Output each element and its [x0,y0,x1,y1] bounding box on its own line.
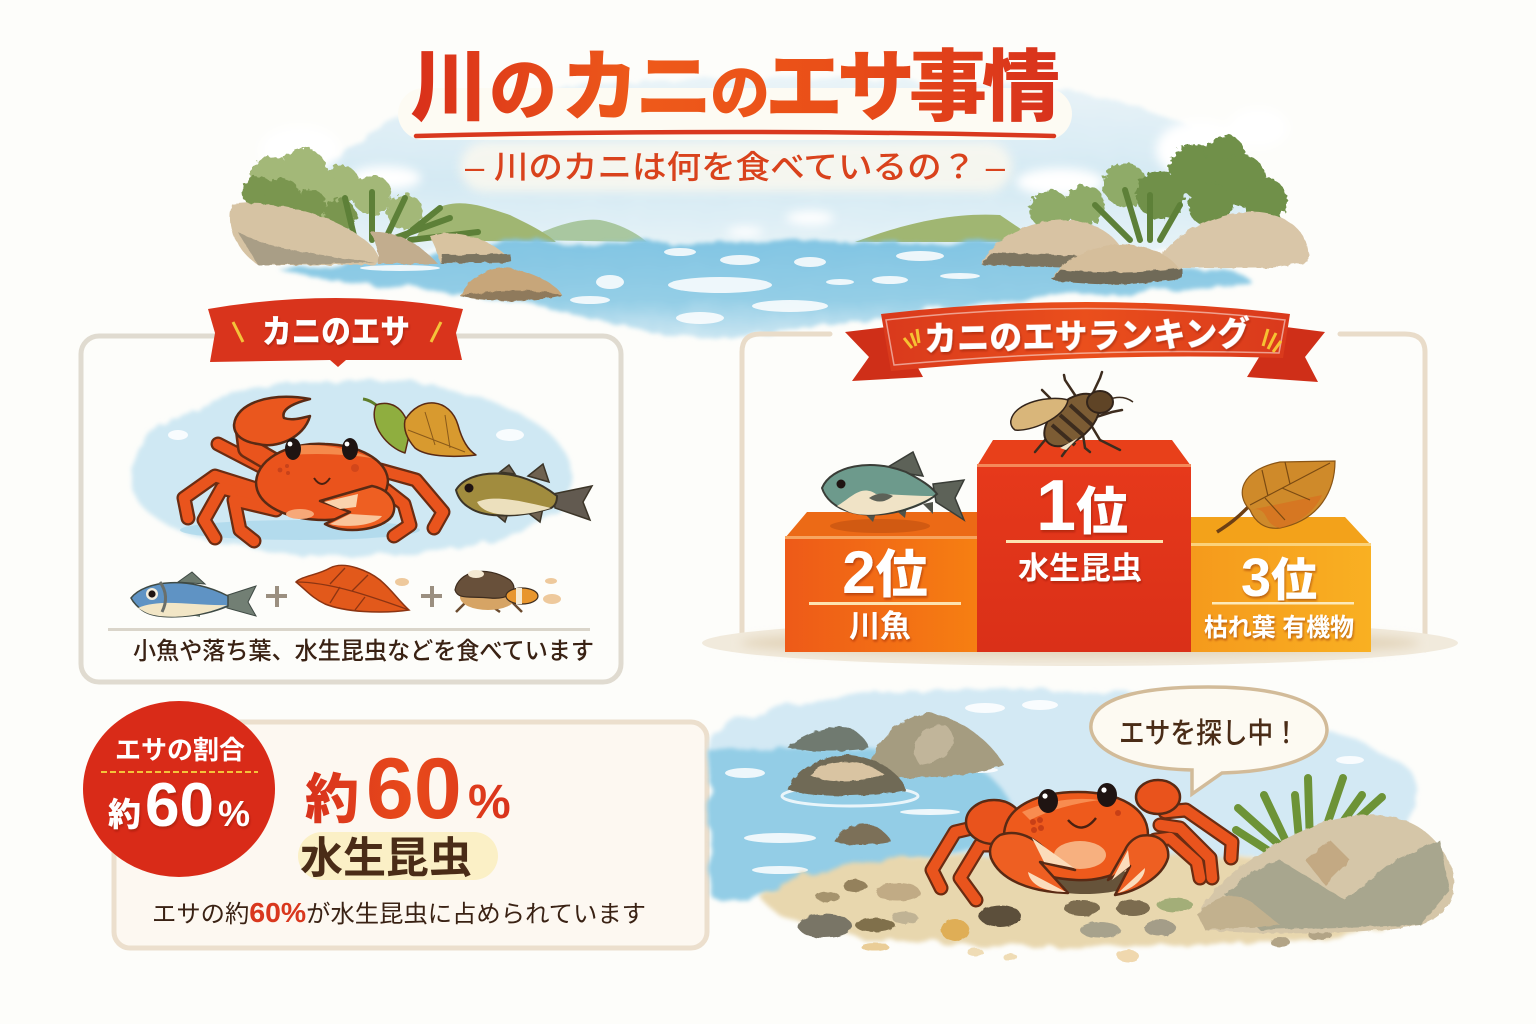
third place label: 枯れ葉 有機物 [1204,614,1354,642]
banner: ranking [845,302,1325,382]
panel: crab food [81,336,621,682]
title: ニ [635,43,713,131]
ribbon tails [845,326,923,381]
badge: food ratio [83,701,275,877]
ribbon accents [233,322,441,342]
rocks in water [788,713,1004,845]
ribbon [881,302,1290,371]
crab left claw [990,833,1075,893]
scene: crab on riverbank [710,687,1454,962]
sky wash [710,689,1416,860]
description: エサの約60%が水生昆虫に占められています [152,897,646,928]
left shrubs [242,148,423,231]
ribbon [208,298,463,367]
icon: plus [266,586,287,607]
water highlights [360,248,980,324]
crab shoulders [1136,780,1180,814]
title: の [710,60,770,127]
icon: plus [421,586,442,607]
podium floor [702,620,1458,666]
speech text: エサを探し中！ [1119,717,1299,750]
icon: water insect [1011,372,1133,456]
crab raised claw [234,397,310,445]
title underline [416,132,1054,136]
first place label: 水生昆虫 [1018,551,1142,586]
icon: orange crab [932,780,1232,900]
crab body [256,444,388,520]
banner text: カニのエサ [262,313,410,350]
title: 川 [410,43,488,131]
crab legs [932,810,1232,900]
panel frame [114,722,707,948]
panel: ranking [702,334,1458,666]
panel frame [742,334,1425,650]
banner text: カニのエサランキング [924,314,1250,359]
icon: river fish [822,452,964,522]
crab legs [184,444,443,541]
big percentage: 60 [366,741,462,837]
podium: first place [977,440,1191,652]
water highlights [725,700,1364,874]
title: 情 [982,43,1060,131]
right shrubs [1030,135,1287,230]
caption: 小魚や落ち葉、水生昆虫などを食べています [133,638,594,665]
title: 事 [909,43,987,131]
water ripple [782,786,918,806]
right grass [1095,190,1180,240]
water [710,747,1011,900]
left grass [345,192,478,240]
clouds [260,108,1288,237]
crab right claw [1108,835,1168,895]
podium: second place [785,512,977,652]
title plate [398,88,1072,192]
first place number: 1位 [1036,466,1128,546]
title: サ [837,43,915,131]
title: の [489,53,557,129]
river water [280,242,1250,338]
far hills [415,203,1040,242]
crab smile [1068,818,1096,828]
second place label: 川魚 [849,609,911,644]
icon: olive fish [456,464,592,522]
divider [108,628,590,631]
badge label: エサの割合 [115,735,245,765]
crab raised arm [246,432,272,462]
crab eyes [285,438,358,460]
third place number: 3位 [1241,548,1317,608]
pebbles [798,880,1332,962]
crab spots [1030,810,1121,833]
title background [398,88,1072,140]
panel frame [81,336,621,682]
river landscape scene [230,77,1308,338]
icon: crab [184,397,443,541]
badge circle [83,701,275,877]
highlight pill [298,832,498,880]
panel: food ratio [114,722,707,948]
title: カ [561,43,639,131]
right rocks [982,212,1308,284]
big rock [1198,815,1454,933]
left rocks [230,203,562,301]
icon: fallen leaf [1217,461,1335,532]
title: エ [765,43,843,131]
sand bank [762,853,1419,947]
crab eyes [1038,783,1117,813]
second place number: 2位 [842,539,928,606]
highlighted label: 水生昆虫 [300,835,472,883]
icon: blue fish [131,572,256,617]
crab smile [314,478,330,484]
crab shadow [1035,866,1135,894]
crab front claw [320,486,394,530]
podium: third place [1191,517,1371,652]
badge value: % [218,793,250,834]
badge value: 約 [108,796,141,833]
big percentage: 約 [305,770,359,830]
big percentage: % [468,776,511,829]
sky wash [285,77,1280,250]
icon: small insect [455,570,561,612]
speech bubble [1091,687,1327,794]
icon: green and orange leaves [363,399,476,456]
subtitle background [460,142,1012,192]
icon: red leaf [296,565,409,612]
subtitle: – 川のカニは何を食べているの？ – [465,149,1005,185]
badge value: 60 [145,771,214,840]
crab spots [278,464,359,475]
ribbon accents [904,329,1281,352]
crab body [1004,792,1148,880]
water wash [130,380,572,556]
banner: crab food [208,298,463,367]
grass [1236,778,1382,855]
